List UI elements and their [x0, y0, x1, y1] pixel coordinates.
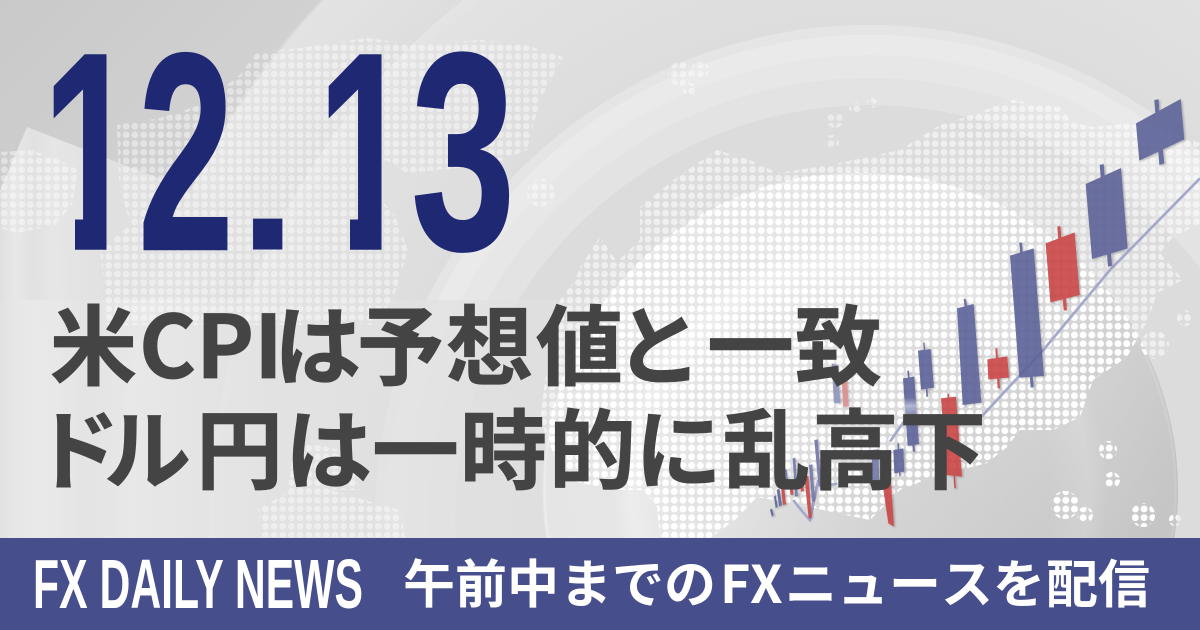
digit 3: 3: [411, 0, 515, 309]
headline line 1: 米: [50, 300, 137, 397]
dot: .: [240, 69, 296, 292]
digit 1: 1: [317, 0, 416, 309]
blue candle 2: [1100, 164, 1112, 267]
red candle 13: [842, 380, 849, 407]
headline line 1: CPI: [139, 278, 283, 404]
red candle 9: [947, 394, 956, 488]
dotted world map: [1, 38, 1200, 538]
footer label: FX DAILY NEWS: [33, 545, 363, 623]
trend line: [793, 178, 1200, 520]
red candle 11: [882, 477, 894, 527]
candlestick chart: [770, 99, 1200, 527]
footer band: [0, 538, 1200, 630]
date: [54, 51, 510, 253]
headline: [33, 278, 986, 501]
blue candle 6: [964, 299, 967, 307]
headline line 2: ドル円は一時的に乱高下: [33, 404, 986, 501]
blue candle 4: [1019, 243, 1034, 387]
headline line 1: は予想値と一致: [274, 300, 882, 397]
red candle 5: [995, 348, 1000, 388]
blue candle 7: [923, 343, 928, 397]
small candles: [770, 488, 782, 517]
digit 1: 1: [42, 0, 141, 309]
blue candle 10: [897, 443, 901, 477]
footer description: 午前中までのFXニュースを配信: [403, 543, 1150, 618]
blue candle 12: [832, 363, 841, 403]
digit 2: 2: [138, 0, 234, 310]
blue candle 8: [907, 371, 915, 452]
blue candle 1: [1154, 99, 1164, 165]
red candle 3: [1057, 226, 1067, 311]
